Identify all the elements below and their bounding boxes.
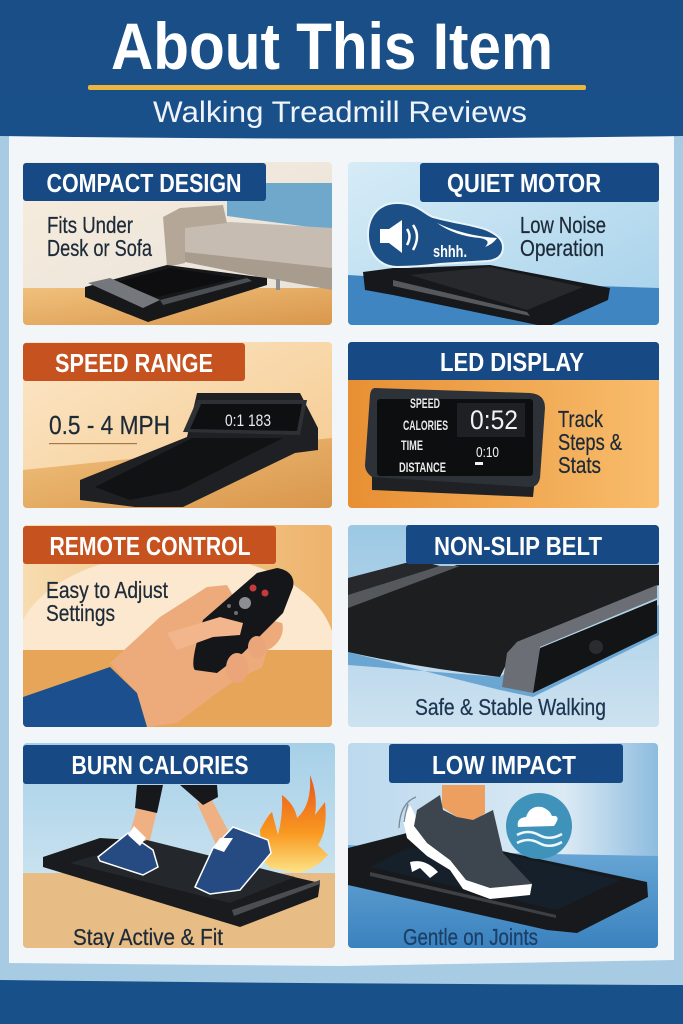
device: LED screen: DISTANCE	[399, 459, 446, 475]
caption: Operation	[520, 235, 604, 261]
wall glow	[23, 564, 332, 650]
caption: Low Noise	[520, 212, 606, 238]
leg	[442, 785, 485, 822]
panel: low impact	[348, 743, 658, 950]
banner: BURN CALORIES	[72, 750, 248, 780]
caption: Stay Active & Fit	[73, 924, 224, 950]
treadmill: 0:1 183	[225, 411, 271, 430]
white content sheet	[9, 130, 674, 966]
banner	[23, 526, 276, 564]
panel: LED display	[348, 342, 659, 508]
panel: burn calories	[23, 743, 335, 950]
belt close-up	[348, 560, 659, 693]
device: LED screen: CALORIES	[403, 417, 448, 433]
treadmill	[363, 265, 610, 327]
banner	[348, 342, 659, 380]
device: LED screen: TIME	[401, 437, 423, 453]
floor	[23, 288, 332, 325]
icon: shoe	[403, 795, 532, 899]
floor shadow	[348, 605, 659, 697]
banner: QUIET MOTOR	[447, 168, 601, 198]
banner	[406, 525, 659, 564]
caption: Gentle on Joints	[403, 924, 538, 950]
footer band	[0, 980, 683, 1024]
title: About This Item	[111, 9, 553, 83]
device: LED screen	[365, 388, 545, 497]
banner: LOW IMPACT	[432, 750, 576, 780]
header banner	[0, 0, 683, 138]
motion lines	[399, 797, 416, 828]
icon: sound bubble: shhh.	[433, 242, 467, 261]
banner: COMPACT DESIGN	[46, 168, 242, 198]
banner	[389, 744, 623, 783]
banner	[420, 163, 659, 202]
banner	[23, 745, 290, 784]
floor	[23, 650, 332, 727]
banner: LED DISPLAY	[440, 347, 584, 377]
caption: Safe & Stable Walking	[415, 694, 606, 720]
icon: sound bubble	[368, 203, 503, 267]
banner: REMOTE CONTROL	[50, 531, 251, 561]
banner	[23, 343, 245, 381]
treadmill	[80, 393, 318, 507]
device: LED screen: 0:10	[476, 444, 499, 461]
treadmill	[348, 833, 648, 933]
caption underline	[49, 443, 137, 444]
panel: quiet motor	[348, 162, 659, 327]
caption: Settings	[46, 600, 115, 626]
sofa	[163, 183, 332, 290]
caption: 0.5 - 4 MPH	[49, 410, 170, 440]
panel: non-slip belt	[348, 525, 659, 727]
floor	[348, 845, 658, 948]
icon: comfort wave badge	[506, 793, 572, 859]
treadmill	[43, 838, 320, 927]
sleeve	[23, 667, 147, 727]
floor	[348, 275, 659, 325]
icon: flame	[260, 775, 328, 873]
title underline	[88, 85, 586, 90]
device: LED screen: SPEED	[410, 395, 440, 411]
subtitle: Walking Treadmill Reviews	[153, 96, 527, 129]
caption: Desk or Sofa	[47, 235, 152, 261]
banner: NON-SLIP BELT	[434, 531, 602, 561]
panel: remote control	[23, 525, 332, 727]
device: LED screen: 0:52	[470, 405, 518, 435]
caption: Stats	[558, 452, 601, 478]
panel: compact design	[23, 162, 332, 325]
caption: Fits Under	[47, 212, 133, 238]
floor	[23, 873, 335, 948]
icon: hand holding remote	[23, 568, 293, 727]
banner: SPEED RANGE	[55, 348, 213, 378]
banner	[23, 163, 266, 201]
caption: Easy to Adjust	[46, 577, 169, 603]
treadmill	[85, 265, 267, 322]
caption: Steps &	[558, 429, 622, 455]
panel: speed range	[23, 342, 332, 508]
legs and shoes	[98, 785, 271, 894]
floor	[23, 438, 332, 508]
caption: Track	[558, 406, 603, 432]
